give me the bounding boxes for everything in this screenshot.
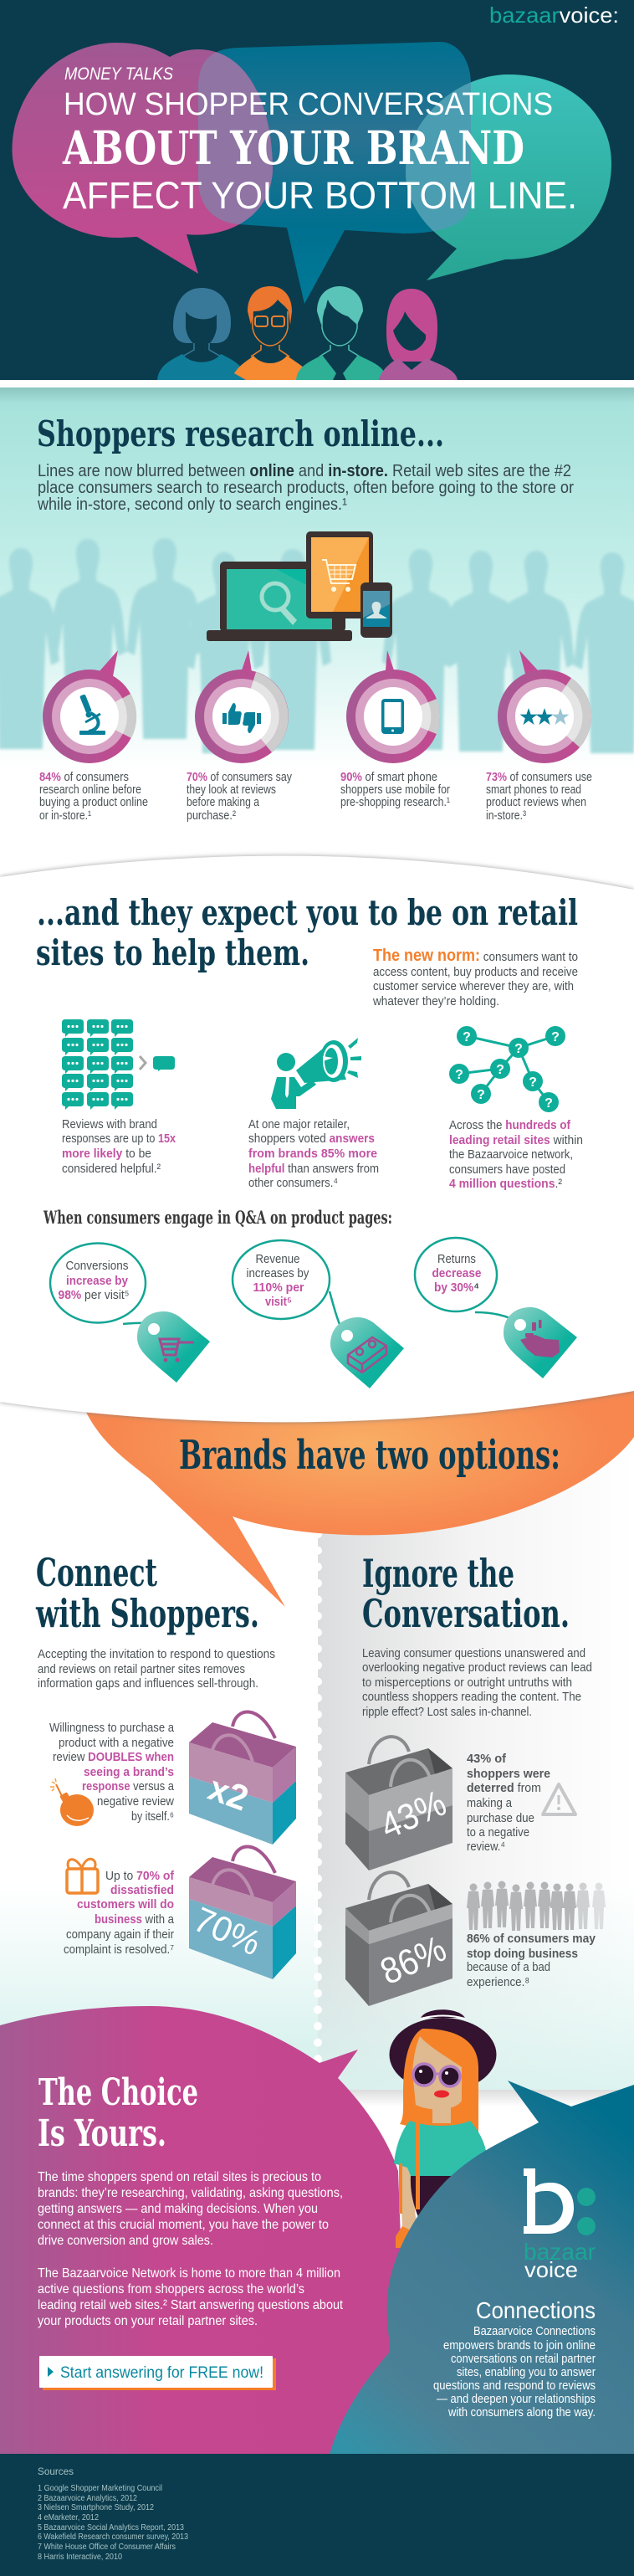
- text block one: drive conversion and grow sales.: [38, 2234, 213, 2248]
- chart: grey bag 86 percent: [345, 1872, 452, 2006]
- intro text: Leaving consumer questions unanswered and: [362, 1646, 585, 1660]
- text: brand responses: more likely to be: [62, 1147, 151, 1161]
- stat text: 70 percent: [187, 770, 292, 823]
- callout: returns: by 30%⁴: [434, 1280, 479, 1295]
- intro text: Accepting the invitation to respond to questions: [38, 1647, 275, 1661]
- stat text: dissatisfied customers: [64, 1869, 175, 1957]
- tag with money: [330, 1317, 404, 1388]
- sources list: 7 White House Office of Consumer Affairs: [38, 2543, 176, 2552]
- heading: [362, 1551, 570, 1636]
- stat text: 90 percent: [340, 770, 450, 809]
- lower background tint: [0, 1883, 318, 2050]
- callout: returns: decrease: [432, 1266, 482, 1280]
- stat text: 70 percent: before making a: [187, 795, 260, 809]
- icon: gift: [67, 1859, 98, 1893]
- text: connections body: empowers brands to join online: [443, 2338, 596, 2353]
- text: brand responses: Reviews with brand: [62, 1117, 157, 1131]
- icon: devices: [207, 531, 392, 641]
- panel: shoppers research online: [0, 387, 634, 865]
- skirt: [411, 2176, 457, 2226]
- stat text: 70 percent: 70% of consumers say: [187, 770, 292, 784]
- chart: shopping bag x2: x2: [203, 1768, 253, 1819]
- intro text: overlooking negative product reviews can lead: [362, 1660, 592, 1675]
- heading: Conversation.: [362, 1591, 570, 1636]
- stat text: 43 percent: [467, 1752, 550, 1854]
- stat text: dissatisfied customers: complaint is resolved.⁷: [64, 1942, 174, 1957]
- stat text: 84 percent: [39, 770, 148, 823]
- callout: returns: Returns: [437, 1252, 476, 1266]
- character: woman in hat: [390, 2009, 497, 2248]
- stat text: 70 percent: purchase.²: [187, 808, 236, 823]
- logo: b mark: [524, 2168, 596, 2282]
- text: four million questions: [449, 1118, 583, 1191]
- stat text: 73 percent: [486, 770, 592, 823]
- intro text: to misperceptions or outright untruths with: [362, 1675, 572, 1690]
- text: answers from brands: shoppers voted answers: [248, 1131, 375, 1146]
- callout: revenue: increases by: [246, 1266, 309, 1280]
- icon: question network: ?: [496, 1063, 504, 1077]
- stat text: 90 percent: 90% of smart phone: [340, 770, 437, 784]
- heading: Connect: [36, 1550, 157, 1595]
- floor behind character: [318, 2090, 634, 2106]
- chart: shopping bag 70 percent: [188, 1847, 296, 1979]
- tag with returning hand: [504, 1307, 577, 1378]
- hair: [400, 2029, 478, 2142]
- text block one: getting answers — and making decisions. When you: [38, 2202, 318, 2216]
- panel: sources: [0, 2454, 634, 2576]
- text: connections body: conversations on retail partner: [451, 2352, 596, 2366]
- stat donut: 73 percent: [498, 650, 591, 763]
- chart: grey bag 43 percent: [345, 1737, 452, 1870]
- callout: conversions: Conversions: [65, 1259, 129, 1273]
- icon: bomb: [50, 1778, 94, 1826]
- stat text: 73 percent: product reviews when: [486, 795, 586, 809]
- sources list: 4 eMarketer, 2012: [38, 2513, 99, 2522]
- icon: question network: ?: [463, 1030, 471, 1044]
- text: answers from brands: from brands 85% more: [248, 1147, 377, 1161]
- panel: expect you on retail sites: [0, 856, 634, 1422]
- sources list: 6 Wakefield Research consumer survey, 2013: [38, 2532, 188, 2542]
- stat text: 43 percent: making a: [467, 1796, 513, 1810]
- sources list: 2 Bazaarvoice Analytics, 2012: [38, 2494, 137, 2503]
- phone: [360, 582, 392, 638]
- sources list: 1 Google Shopper Marketing Council: [38, 2484, 162, 2493]
- sources list: 8 Harris Interactive, 2010: [38, 2553, 122, 2562]
- intro text: while in-store, second only to search engines.¹: [37, 495, 347, 514]
- text: four million questions: 4 million questions.²: [449, 1177, 562, 1191]
- icon: microscope: [79, 694, 105, 735]
- stat text: 73 percent: 73% of consumers use: [486, 770, 592, 784]
- logo: b mark: voice: [524, 2257, 578, 2282]
- heading: The Choice: [38, 2071, 198, 2114]
- title: ABOUT YOUR BRAND: [62, 121, 524, 175]
- text: brand responses: considered helpful.²: [62, 1162, 161, 1176]
- icon: smartphone: [381, 699, 404, 734]
- text: the new norm: access content, buy products and receive: [373, 965, 578, 979]
- text: connections body: — and deepen your relationships: [437, 2392, 596, 2406]
- stat text: 86 percent: because of a bad: [467, 1960, 550, 1974]
- stat donut: 70 percent: [195, 650, 289, 763]
- panel: connect with shoppers: [35, 1550, 296, 1979]
- panel: header: [0, 0, 634, 380]
- tablet: [306, 531, 373, 618]
- text: brand responses: responses are up to 15x: [62, 1131, 176, 1146]
- stat text: 90 percent: pre-shopping research.¹: [340, 795, 450, 809]
- text block one: brands: they’re researching, validating, asking questions,: [38, 2186, 343, 2200]
- heading: with Shoppers.: [35, 1591, 259, 1636]
- bubble overlap: pink and blue: [198, 52, 273, 224]
- icon: question network: ?: [514, 1042, 523, 1056]
- stat text: 84 percent: or in-store.¹: [39, 808, 91, 823]
- lips: [434, 2091, 449, 2097]
- speech bubble: pink: [12, 43, 273, 274]
- stat text: doubles: seeing a brand’s: [84, 1765, 174, 1779]
- stat text: 43 percent: to a negative: [467, 1825, 529, 1840]
- callout: conversions: [50, 1244, 210, 1383]
- stat text: dissatisfied customers: dissatisfied: [110, 1883, 174, 1897]
- intro text: [38, 1647, 275, 1691]
- text block one: The time shoppers spend on retail sites is precious to: [38, 2170, 321, 2184]
- hat: [390, 2009, 497, 2091]
- text block two: [38, 2266, 344, 2328]
- heading: [36, 892, 578, 973]
- icon: megaphone man: [271, 1038, 361, 1109]
- button: start answering: [39, 2356, 276, 2390]
- text: the new norm: The new norm: consumers want to: [373, 947, 578, 965]
- intro text: place consumers search to research products, often before going to the store or: [38, 479, 574, 497]
- button: start answering: Start answering for FREE now!: [60, 2364, 263, 2382]
- stat text: doubles: response versus a: [82, 1779, 175, 1793]
- text: answers from brands: [248, 1117, 379, 1190]
- stat text: 84 percent: research online before: [39, 783, 141, 797]
- stat text: 90 percent: shoppers use mobile for: [340, 783, 450, 797]
- speech bubble: the choice is yours: [0, 2006, 401, 2454]
- text: the new norm: [372, 947, 578, 1008]
- icon: question network: ?: [477, 1088, 485, 1102]
- chart: grey bag 86 percent: 86%: [375, 1928, 452, 1993]
- text: four million questions: Across the hundreds of: [449, 1118, 571, 1132]
- person: pink woman: [379, 289, 458, 380]
- callout: revenue: Revenue: [256, 1252, 299, 1266]
- icon: warning triangle: [543, 1784, 575, 1814]
- stat text: 43 percent: shoppers were: [467, 1767, 550, 1781]
- heading: [38, 2071, 198, 2155]
- text block two: The Bazaarvoice Network is home to more than 4 million: [38, 2266, 340, 2281]
- stat text: dissatisfied customers: customers will do: [77, 1897, 174, 1911]
- text block one: connect at this crucial moment, you have the power to: [38, 2218, 329, 2232]
- text: connections body: [433, 2324, 596, 2419]
- icon: question network: ?: [545, 1096, 553, 1111]
- text: answers from brands: other consumers.⁴: [248, 1176, 338, 1190]
- stat text: doubles: negative review: [97, 1794, 174, 1809]
- subheading: Q and A: When consumers engage in Q&A on product pages:: [43, 1207, 392, 1228]
- text: brand responses: [62, 1117, 176, 1176]
- stat text: 86 percent: experience.⁸: [467, 1975, 529, 1989]
- text: four million questions: leading retail sites within: [449, 1133, 583, 1147]
- text: connections body: questions and respond to reviews: [433, 2378, 596, 2393]
- stat text: 43 percent: purchase due: [467, 1811, 534, 1825]
- chart: shopping bag x2: [189, 1712, 296, 1845]
- speech bubble: connections: [330, 2081, 634, 2454]
- chart: shopping bag 70 percent: 70%: [188, 1899, 267, 1963]
- icon: thumbs: [222, 703, 261, 733]
- bubble overlap: teal and blue: [406, 82, 471, 231]
- stat text: 70 percent: they look at reviews: [187, 783, 276, 797]
- stat text: doubles: by itself.⁶: [131, 1809, 174, 1824]
- stat text: dissatisfied customers: company again if their: [66, 1927, 174, 1942]
- callout: revenue: visit⁵: [265, 1295, 292, 1309]
- title: HOW SHOPPER CONVERSATIONS: [64, 87, 553, 122]
- callout: revenue: [233, 1240, 404, 1388]
- stat text: 84 percent: buying a product online: [39, 795, 148, 809]
- heading: connections: Connections: [476, 2297, 596, 2323]
- purse and strap: [396, 2122, 420, 2248]
- icon: crowd silhouettes: [467, 1881, 606, 1931]
- speech bubble: blue: [198, 42, 471, 304]
- heading: Ignore the: [362, 1551, 514, 1596]
- speech bubble: teal: [406, 74, 611, 280]
- text block two: leading retail web sites.² Start answering questions about: [38, 2298, 344, 2312]
- chart: grey bag 43 percent: 43%: [375, 1783, 452, 1847]
- stat text: dissatisfied customers: business with a: [95, 1912, 175, 1927]
- stat text: dissatisfied customers: Up to 70% of: [105, 1869, 175, 1883]
- shirt: [394, 2121, 487, 2176]
- intro text: ripple effect? Lost sales in-channel.: [362, 1705, 532, 1719]
- text: answers from brands: At one major retailer,: [248, 1117, 350, 1131]
- text: connections body: Bazaarvoice Connections: [473, 2324, 596, 2338]
- stat text: doubles: review DOUBLES when: [53, 1750, 174, 1764]
- heading: [35, 1550, 259, 1636]
- stat text: 43 percent: review.⁴: [467, 1840, 505, 1854]
- text: connections body: sites, enabling you to answer: [457, 2365, 596, 2379]
- stat text: doubles: [49, 1721, 175, 1824]
- icon: question network: ?: [529, 1075, 537, 1090]
- face: [412, 2036, 462, 2110]
- icon: review chat grid: [62, 1019, 175, 1110]
- stat text: 86 percent: stop doing business: [467, 1947, 578, 1961]
- intro text: [362, 1646, 592, 1719]
- heading: Is Yours.: [38, 2112, 166, 2155]
- icon: question network: ?: [551, 1030, 560, 1044]
- stat text: 73 percent: smart phones to read: [486, 783, 581, 797]
- sources heading: Sources: [38, 2466, 74, 2477]
- heading: sites to help them.: [36, 932, 309, 973]
- logo: b mark: bazaar: [524, 2239, 596, 2265]
- arms: [399, 2159, 417, 2239]
- intro text: information gaps and influences sell-through.: [38, 1676, 258, 1691]
- text: answers from brands: helpful than answers from: [248, 1162, 379, 1176]
- intro text: countless shoppers reading the content. The: [362, 1690, 581, 1704]
- sunglasses: [413, 2064, 460, 2086]
- person: blue woman: [157, 288, 246, 380]
- logo: bazaarvoice: bazaarvoice:: [489, 3, 619, 28]
- stat text: doubles: Willingness to purchase a: [49, 1721, 175, 1735]
- text block two: active questions from shoppers across the world’s: [38, 2282, 304, 2296]
- icon: question network: ?: [455, 1068, 463, 1082]
- intro text: and reviews on retail partner sites removes: [38, 1662, 245, 1676]
- intro text: [37, 462, 574, 514]
- orange speech bubble: [79, 1381, 634, 1607]
- callout: revenue: 110% per: [253, 1280, 304, 1295]
- stat donut: 90 percent: [346, 650, 440, 763]
- callout: conversions: increase by: [66, 1274, 129, 1288]
- stat donut: 84 percent: [43, 650, 136, 763]
- sources list: 3 Nielsen Smartphone Study, 2012: [38, 2503, 154, 2512]
- text block one: [38, 2170, 343, 2248]
- icon: question network: [449, 1026, 565, 1112]
- callout: returns: [415, 1238, 577, 1378]
- stat text: 73 percent: in-store.³: [486, 808, 526, 823]
- text: connections body: with consumers along the way.: [447, 2405, 596, 2419]
- panel: ignore background: [318, 1423, 634, 2091]
- sources list: 5 Bazaarvoice Social Analytics Report, 2013: [38, 2523, 184, 2532]
- stat text: 84 percent: 84% of consumers: [39, 770, 129, 784]
- stat text: 86 percent: 86% of consumers may: [467, 1932, 596, 1946]
- text: the new norm: whatever they’re holding.: [372, 994, 499, 1008]
- text: the new norm: customer service wherever they are, with: [373, 979, 574, 993]
- intro text: Lines are now blurred between online and in-store. Retail web sites are the #2: [38, 462, 571, 480]
- callout: conversions: 98% per visit⁵: [59, 1288, 129, 1302]
- title: [62, 64, 577, 217]
- stat text: 43 percent: deterred from: [467, 1781, 541, 1795]
- person: orange man with glasses: [234, 286, 306, 380]
- title: MONEY TALKS: [64, 64, 173, 84]
- panel: ignore the conversation: [345, 1551, 606, 2006]
- title: AFFECT YOUR BOTTOM LINE.: [63, 174, 577, 217]
- laptop: [207, 562, 352, 641]
- icon: stars: [520, 708, 569, 725]
- text: four million questions: the Bazaarvoice network,: [449, 1147, 573, 1162]
- stat text: 86 percent: [467, 1932, 596, 1989]
- stat text: doubles: product with a negative: [59, 1736, 174, 1750]
- person: teal man with tie: [296, 286, 387, 380]
- background crowd silhouettes: [0, 538, 634, 753]
- text block two: your products on your retail partner sites.: [38, 2314, 258, 2328]
- sources list: [38, 2484, 188, 2562]
- text: four million questions: consumers have posted: [449, 1162, 565, 1177]
- tag with cart: [137, 1311, 210, 1383]
- stat text: 43 percent: 43% of: [467, 1752, 507, 1766]
- heading: Shoppers research online...: [37, 413, 444, 454]
